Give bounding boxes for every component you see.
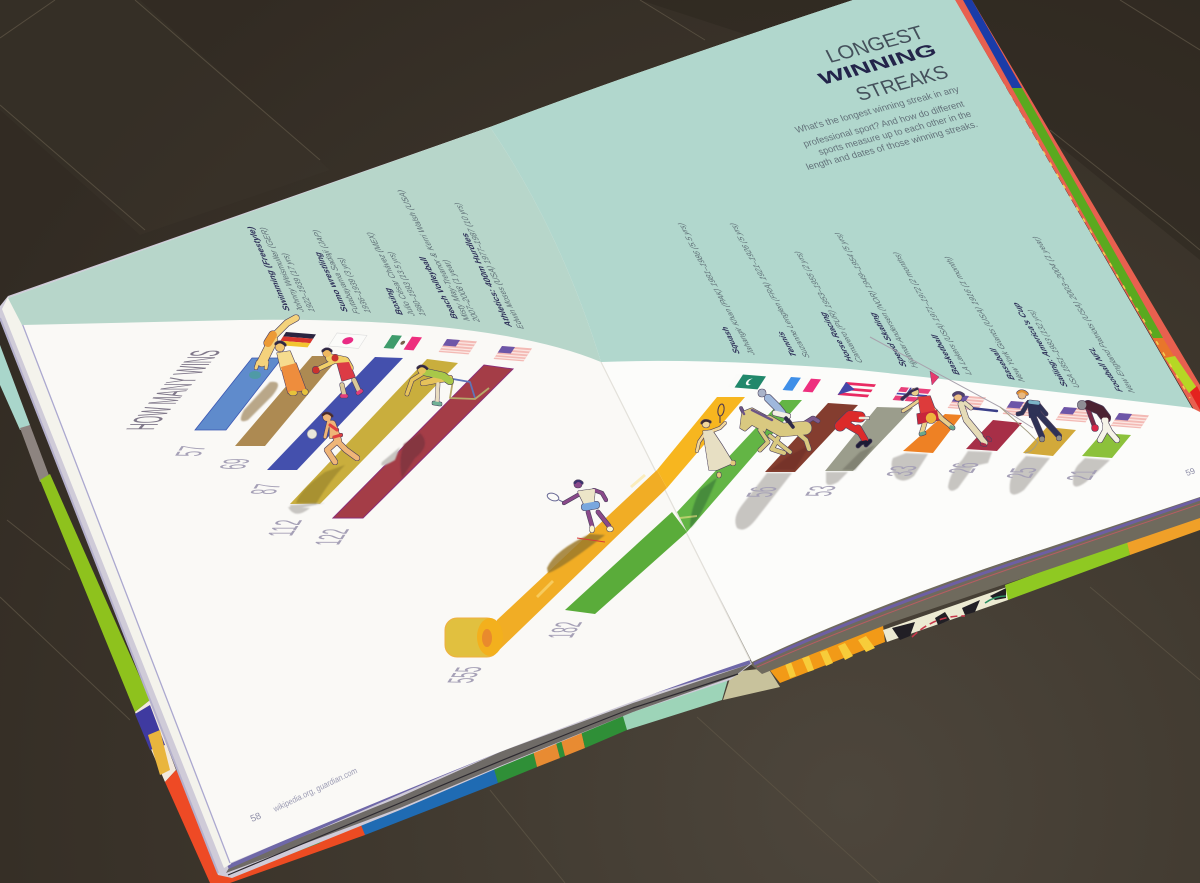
flag: USA football right — [1111, 413, 1149, 428]
line: squash court mark — [577, 538, 605, 542]
bar: sumo 69 — [235, 356, 340, 446]
flag: Japan — [329, 333, 367, 348]
title: STREAKS — [852, 62, 952, 105]
record labels: left page: Athletics: 400m Hurdles — [459, 232, 514, 328]
intro text: What's the longest winning streak in any — [793, 84, 961, 136]
figure: beach volleyball player — [323, 413, 357, 462]
figure: speed skater — [840, 416, 870, 446]
bar: baseball 26 — [966, 420, 1022, 451]
intro text — [793, 84, 980, 173]
roll at the end of the squash bar — [445, 618, 503, 657]
figure: sailor — [1018, 391, 1061, 442]
footer: sources: wikipedia.org, guardian.com — [271, 765, 359, 814]
figure: squash player — [564, 480, 613, 532]
icon: squash racket — [546, 492, 565, 503]
record labels: right page: Jahangir Khan (PAK) 1981–1986 (5.5 yrs) — [675, 222, 757, 356]
flag: Mexico — [384, 335, 422, 350]
intro text: sports measure up to each other in the — [816, 109, 973, 158]
flag: USA baseball — [948, 395, 986, 410]
page block: under left page — [0, 127, 752, 878]
right page — [490, 0, 1200, 662]
record labels: right page: Sailing: America's Cup — [1010, 302, 1070, 387]
text: 57 — [166, 446, 215, 456]
wins numbers: 56 — [737, 487, 786, 497]
record labels: left page: 1922–1939 (17 yrs) — [279, 253, 317, 312]
figure: hurdler — [407, 366, 450, 404]
book cover edge: left side — [0, 345, 240, 883]
record labels: right page: Camarero (PUR) 1953–1955 (2 yrs) — [792, 251, 865, 363]
figures: athletes — [249, 318, 1117, 542]
bar: swimming 57 — [195, 358, 282, 430]
record labels: left page: 1936–1939 (3 yrs) — [335, 257, 373, 313]
intro text: professional sport? And how do different — [801, 99, 967, 150]
book cover edge: bottom right stripes — [768, 515, 1200, 683]
bar: football 21 — [1082, 433, 1131, 458]
bar: horse racing 56 — [765, 403, 858, 472]
flag: Norway — [893, 387, 931, 402]
figure: basketball player — [902, 388, 953, 434]
record labels: left page — [245, 189, 526, 329]
wins numbers: 87 — [241, 484, 290, 494]
flag: France — [783, 377, 821, 392]
flag: Puerto Rico — [838, 382, 876, 397]
wins numbers — [166, 446, 1106, 683]
flag: USA sailing — [1003, 401, 1041, 416]
figure: baseball player — [954, 393, 990, 445]
figure: tennis player in dress — [697, 420, 736, 478]
record labels: left page: Swimming (Freestyle) — [245, 226, 292, 311]
footer: left page number: 58 — [249, 811, 263, 825]
icon: sailing rope and pennant — [870, 337, 1038, 453]
record labels: right page: Speed Skating — [866, 311, 909, 367]
record labels: left page: Edwin Moses (USA) 1977–1987 (10 yrs) — [452, 202, 526, 329]
figure: sumo wrestler — [276, 342, 308, 395]
icon: water splash — [249, 371, 261, 379]
wins numbers: 112 — [258, 520, 311, 536]
record labels: left page: Johnny Weismuller (GER) — [257, 227, 306, 313]
record labels: right page: Squash — [719, 326, 742, 354]
record labels: left page: 1980–1993 (13.5 yrs) — [385, 251, 428, 316]
record labels: right page: New England Patriots (USA) 2003–2004 (1 year) — [1030, 236, 1137, 393]
page block: under right page — [748, 496, 1200, 674]
wins numbers: 555 — [438, 667, 491, 683]
title: WINNING — [815, 40, 940, 89]
figure: horse and jockey — [740, 389, 818, 453]
intro text: length and dates of those winning streaks. — [804, 119, 980, 173]
record labels: right page: USA 1851–1983 (132 yrs) — [1025, 309, 1082, 388]
text: HOW MANY WINS — [118, 350, 230, 430]
record labels: right page: Hjalmar Andersen (NOR) 1949–1954 (5 yrs) — [832, 232, 920, 368]
flag: USA hurdles — [494, 346, 532, 361]
record labels: left page: Boxing — [382, 287, 405, 315]
wins numbers: 21 — [1057, 470, 1106, 480]
flag: Pakistan — [728, 374, 766, 389]
title: LONGEST — [822, 22, 928, 67]
bar: squash 555 left page — [493, 470, 667, 656]
record labels: right page: LA Lakers (USA) 1971–1972 (2 months) — [890, 252, 974, 375]
record labels: right page: Horse Racing — [817, 311, 855, 362]
bar chart: streak bars — [195, 356, 1131, 657]
wins numbers: 122 — [305, 529, 358, 545]
record labels: left page: Beach Volleyball — [417, 256, 460, 319]
record labels: left page: Julio César Chávez (MEX) — [364, 232, 417, 317]
bar: squash 555 right page — [657, 397, 745, 488]
wins numbers: 26 — [939, 463, 988, 473]
bar: tennis 182 right page — [677, 400, 802, 532]
bar: volleyball 112 — [290, 359, 458, 504]
bar: hurdles 122 — [333, 365, 513, 518]
figure: boxer — [312, 349, 361, 396]
icon: hurdle — [450, 379, 489, 399]
bar: speed skating 53 — [825, 407, 913, 471]
bar: sailing 25 — [1023, 427, 1076, 456]
record labels: left page: Sumo wrestling — [312, 251, 350, 312]
left mint header panel — [8, 127, 601, 362]
flag: USA beach volleyball — [439, 339, 477, 354]
bar: tennis 182 left page — [565, 512, 687, 614]
title — [815, 22, 952, 105]
book cover edge: right side — [955, 0, 1200, 420]
wins numbers: 25 — [997, 468, 1046, 478]
record labels: right page: Suzanne Lenglen (FRA) 1921–1926 (5 yrs) — [727, 222, 812, 358]
right mint header panel — [490, 0, 1192, 408]
fold highlight on squash and tennis bars — [536, 474, 697, 598]
footer: right page number: 59 — [1184, 465, 1197, 478]
record labels: right page: Basketball — [929, 334, 962, 375]
wins numbers: 182 — [538, 622, 591, 638]
wins numbers: 33 — [877, 466, 926, 476]
record labels: left page: 2007–2008 (1 year) — [440, 259, 482, 323]
wins numbers: 53 — [796, 486, 845, 496]
wins numbers: 69 — [210, 459, 259, 469]
flags — [278, 332, 1149, 428]
figure shadows — [241, 382, 1110, 573]
flag: Germany — [278, 332, 316, 347]
bar: basketball 33 — [903, 414, 962, 453]
record labels: left page: Misty May-Treanor & Kerri Walsh (USA) — [395, 189, 472, 321]
figure: American football player — [1078, 401, 1117, 440]
book cover edge: bottom left stripes — [210, 668, 780, 883]
record labels: right page: Tennis — [775, 331, 799, 357]
record labels: right page: New York Giants (USA) 1916 (1 month) — [942, 256, 1027, 382]
icon: tennis racket — [717, 404, 725, 423]
icon: baseball bat — [970, 408, 997, 411]
bar: boxing 87 — [267, 357, 403, 470]
icon: volleyball — [307, 429, 317, 439]
left page — [8, 127, 750, 863]
record labels: left page: Futabayama Sadaji (JAP) — [310, 229, 362, 314]
record labels: right page: Football NFL — [1085, 346, 1125, 392]
flag: USA football left — [1056, 407, 1094, 422]
record labels: right page — [675, 222, 1137, 393]
figure: swimmer diving — [256, 318, 296, 368]
record labels: right page: Baseball — [987, 347, 1017, 380]
